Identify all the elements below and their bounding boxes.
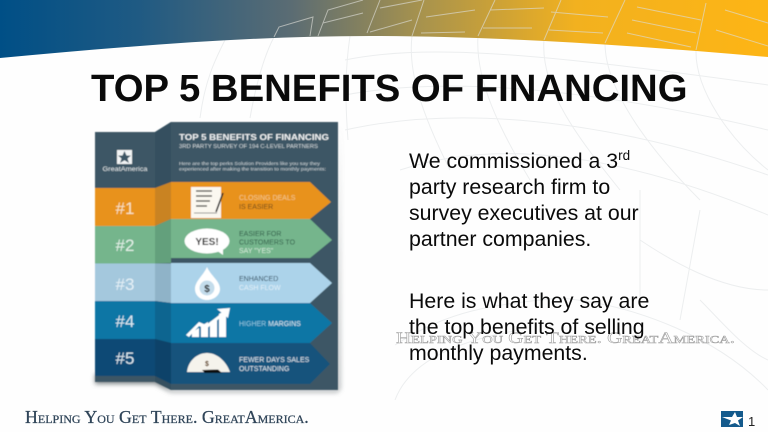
band 5 [95, 339, 330, 384]
band 5: $ [205, 361, 209, 368]
band 2: EASIER FOR [239, 231, 281, 238]
band 2 [95, 219, 332, 264]
band 4 [95, 301, 332, 343]
paragraph 1: party research firm to [409, 175, 610, 199]
header banner [0, 0, 768, 58]
footer tagline: Helping You Get There. GreatAmerica. [25, 407, 309, 427]
paragraph 1: partner companies. [409, 227, 591, 251]
heading inside infographic: experienced after making the transition to monthly payments: [179, 166, 326, 172]
body text [409, 148, 649, 365]
band 1 [95, 182, 331, 226]
heading inside infographic: TOP 5 BENEFITS OF FINANCING [179, 133, 329, 142]
band 4: #4 [116, 312, 134, 331]
logo: GreatAmerica [102, 166, 148, 173]
paragraph 2: Here is what they say are [409, 289, 649, 313]
ghost tagline: Helping You Get There. GreatAmerica. [396, 330, 735, 347]
band 3 [95, 263, 332, 303]
paragraph 2: monthly payments. [409, 341, 588, 365]
heading inside infographic: Here are the top perks Solution Providers like you say they [179, 161, 321, 167]
band 2: YES! [195, 237, 219, 248]
band 5: FEWER DAYS SALES [239, 357, 310, 364]
paragraph 1 [409, 148, 639, 251]
panel shadow [95, 125, 340, 392]
band 5: #5 [116, 349, 134, 368]
logo [102, 150, 148, 173]
band 3: $ [204, 284, 210, 295]
band 2: CUSTOMERS TO [239, 240, 296, 246]
band 3: ENHANCED [239, 276, 278, 283]
band 3: #3 [116, 275, 134, 294]
dark panel background [95, 122, 338, 390]
band 3: CASH FLOW [239, 285, 281, 292]
band 2: #2 [116, 236, 134, 255]
band 1: #1 [116, 199, 134, 218]
paragraph 2: the top benefits of selling [409, 315, 645, 339]
paragraph 1: We commissioned a 3rd [409, 148, 630, 173]
heading inside infographic [179, 133, 329, 172]
band 5: OUTSTANDING [239, 366, 289, 373]
band 2: SAY "YES" [239, 248, 274, 255]
heading inside infographic: 3RD PARTY SURVEY OF 194 C-LEVEL PARTNERS [179, 144, 319, 150]
band 1: CLOSING DEALS [239, 195, 296, 202]
paragraph 2 [409, 289, 649, 365]
band 4: HIGHER MARGINS [239, 321, 301, 328]
band 1: IS EASIER [239, 204, 273, 211]
title: TOP 5 BENEFITS OF FINANCING [91, 67, 688, 110]
page number: 1 [748, 414, 755, 429]
paragraph 1: survey executives at our [409, 201, 639, 225]
